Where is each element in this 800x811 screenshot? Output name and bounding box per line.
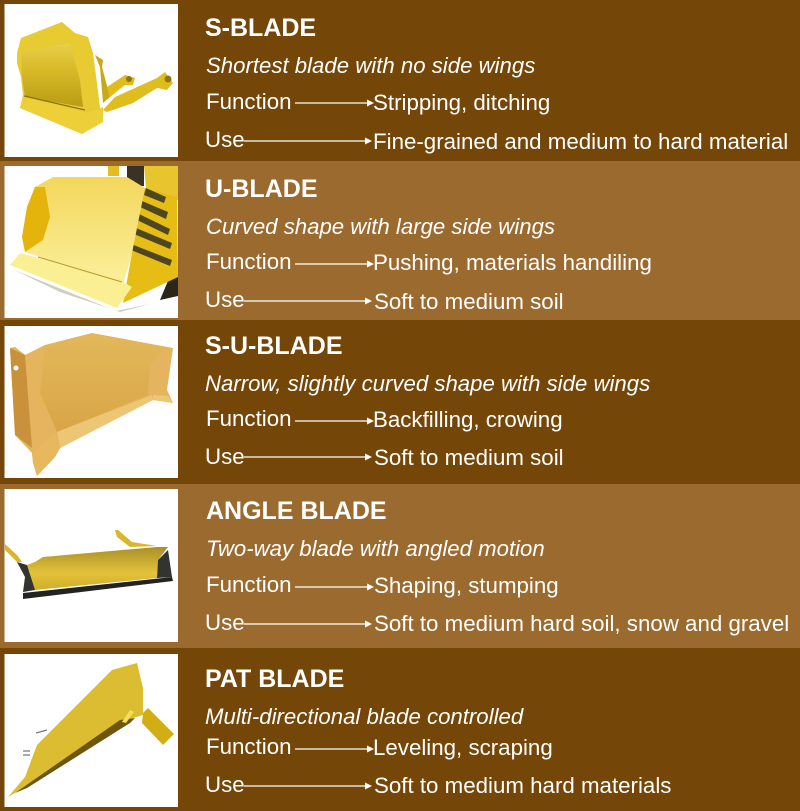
function row: Function xyxy=(206,406,292,431)
use row xyxy=(205,772,671,798)
photo: S-U blade xyxy=(4,326,178,478)
photo: U-blade xyxy=(4,166,178,318)
panel: U-Blade xyxy=(0,161,800,321)
use row: Fine-grained and medium to hard material xyxy=(373,129,788,154)
function row xyxy=(206,572,559,598)
photo: S-blade xyxy=(4,4,178,157)
photo: PAT blade xyxy=(4,654,178,807)
use row: Soft to medium soil xyxy=(374,289,564,314)
description: Multi-directional blade controlled xyxy=(205,704,524,729)
heading: ANGLE BLADE xyxy=(206,497,387,525)
heading: U-BLADE xyxy=(205,175,318,203)
use row: Use xyxy=(205,287,245,312)
use row: Use xyxy=(205,610,245,635)
function row xyxy=(206,734,553,760)
use row: Soft to medium hard materials xyxy=(374,773,671,798)
function row: Shaping, stumping xyxy=(374,573,559,598)
function row xyxy=(206,406,563,432)
description: Shortest blade with no side wings xyxy=(206,53,535,78)
use row xyxy=(205,127,788,154)
panel: Angle Blade xyxy=(0,484,800,648)
heading: PAT BLADE xyxy=(205,665,344,693)
use row: Use xyxy=(205,772,245,797)
use row: Soft to medium hard soil, snow and gravel xyxy=(374,611,789,636)
function row xyxy=(206,249,652,275)
function row: Pushing, materials handiling xyxy=(373,250,652,275)
use row xyxy=(205,444,564,470)
function row: Stripping, ditching xyxy=(373,90,550,115)
photo: angle blade xyxy=(4,489,178,642)
function row: Function xyxy=(206,249,292,274)
use row: Soft to medium soil xyxy=(374,445,564,470)
heading: S-U-BLADE xyxy=(205,332,342,360)
use row: Use xyxy=(205,444,245,469)
function row xyxy=(206,89,550,115)
use row xyxy=(205,610,789,636)
panel: S-U-Blade xyxy=(0,321,800,484)
use row xyxy=(205,287,564,314)
function row: Leveling, scraping xyxy=(373,735,553,760)
function row: Function xyxy=(206,89,292,114)
description: Narrow, slightly curved shape with side wings xyxy=(205,371,650,396)
function row: Backfilling, crowing xyxy=(373,407,563,432)
use row: Use xyxy=(205,127,245,152)
description: Curved shape with large side wings xyxy=(206,214,555,239)
heading: S-BLADE xyxy=(205,14,316,42)
function row: Function xyxy=(206,572,292,597)
panel: S-Blade xyxy=(0,0,800,161)
function row: Function xyxy=(206,734,292,759)
description: Two-way blade with angled motion xyxy=(206,536,545,561)
panel: PAT Blade xyxy=(0,648,800,811)
